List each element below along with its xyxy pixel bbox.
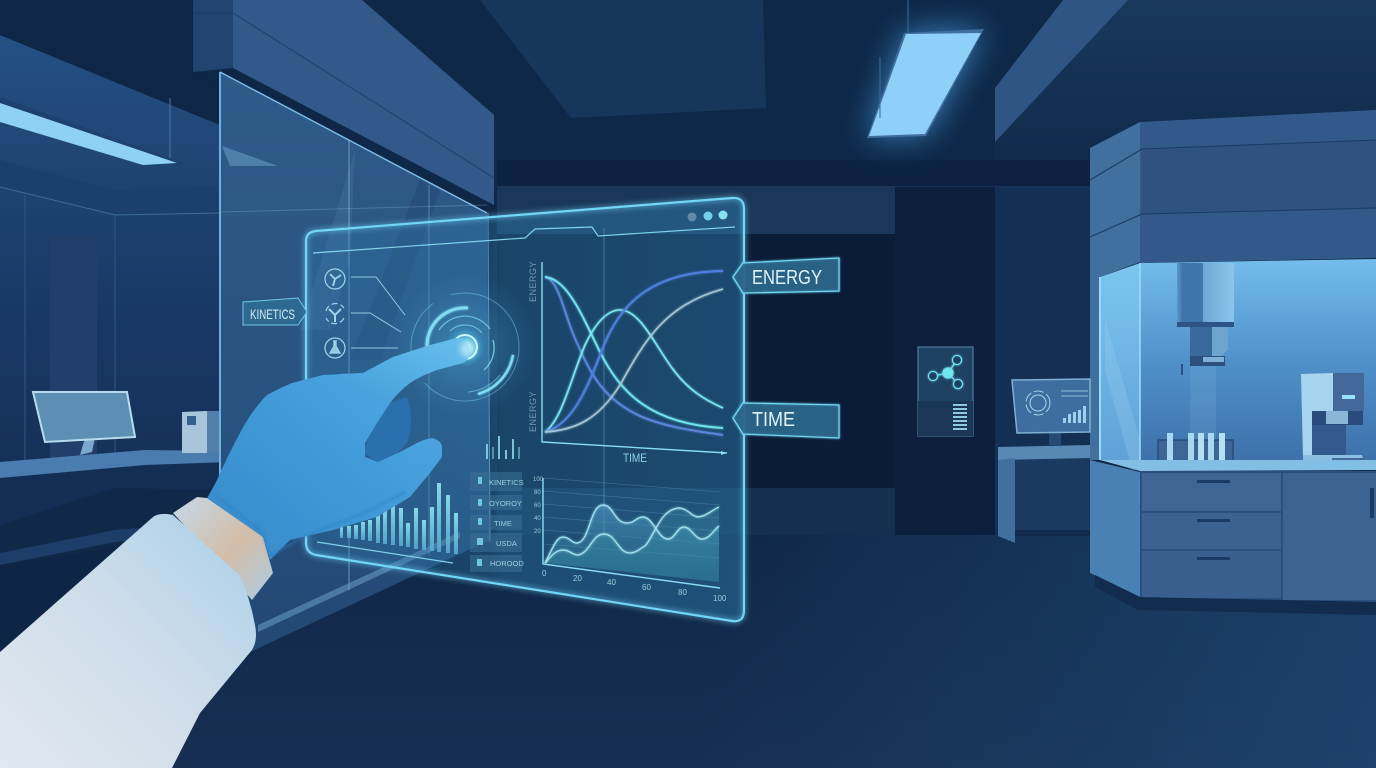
window controls [688, 210, 728, 222]
lower chart tick labels: 40 [607, 578, 616, 587]
left room wall and ceiling [0, 0, 220, 768]
icon: branched molecule [326, 304, 344, 324]
lower chart tick labels: 20 [534, 529, 541, 535]
lower chart tick labels: 60 [642, 583, 651, 592]
lower chart tick labels: 80 [534, 490, 541, 496]
main line chart [542, 262, 727, 455]
main chart axis labels: ENERGY [528, 261, 538, 302]
side data table [470, 472, 524, 572]
lower chart axis line [317, 542, 453, 563]
glass partition [220, 72, 490, 660]
holographic display panel [306, 198, 744, 621]
lower area chart [543, 478, 720, 588]
hand: blue nitrile glove pointing [207, 338, 476, 560]
instrument column [1177, 263, 1234, 441]
test tube rack [1158, 433, 1233, 466]
ceiling beam right [995, 0, 1128, 142]
lower bar chart [340, 483, 458, 554]
lower chart tick labels: 40 [534, 516, 541, 522]
icon: kinetics molecule [325, 269, 345, 289]
icon connector lines [351, 277, 405, 348]
mini bar chart [486, 436, 520, 459]
side data table: USDA [496, 539, 517, 548]
lower cabinets right [1090, 460, 1376, 615]
wall panel with molecule icon [918, 347, 973, 436]
target dial [411, 293, 519, 401]
icon: flask [325, 338, 345, 358]
lower chart tick labels: 20 [573, 574, 582, 583]
side data table: OYOROY [489, 499, 522, 508]
lab enclosure with instrument [1100, 259, 1376, 471]
back desk with monitor [998, 379, 1090, 543]
side data table: HOROOD [490, 559, 524, 568]
label: kinetics [243, 298, 307, 325]
overhead beam above glass [193, 0, 494, 205]
lower chart tick labels: 80 [678, 588, 687, 597]
label: energy: ENERGY [752, 267, 822, 289]
lower chart tick labels [533, 477, 727, 603]
side data table: KINETICS [489, 478, 524, 487]
arm: lab coat sleeve and cuff [0, 497, 273, 768]
lower chart tick labels: 0 [542, 569, 547, 578]
left ceiling light strip [0, 97, 183, 166]
lower chart tick labels: 100 [713, 594, 727, 603]
main chart axis labels [528, 261, 647, 465]
side data table: TIME [494, 519, 512, 528]
lower chart tick labels: 100 [533, 477, 544, 483]
left bench with monitor and boxes [0, 392, 232, 478]
benchtop analyser [1301, 373, 1365, 467]
label: time [733, 403, 839, 438]
upper wall cabinet right [1090, 110, 1376, 460]
lower chart tick labels: 60 [534, 503, 541, 509]
ceiling light panel [867, 0, 984, 138]
header bar line [313, 227, 735, 253]
main chart axis labels: ENERGY [528, 391, 538, 432]
label: kinetics: KINETICS [250, 306, 295, 322]
countertop [1100, 460, 1376, 471]
label: energy [733, 258, 839, 293]
label: time: TIME [752, 409, 795, 431]
main chart axis labels: TIME [623, 451, 647, 465]
